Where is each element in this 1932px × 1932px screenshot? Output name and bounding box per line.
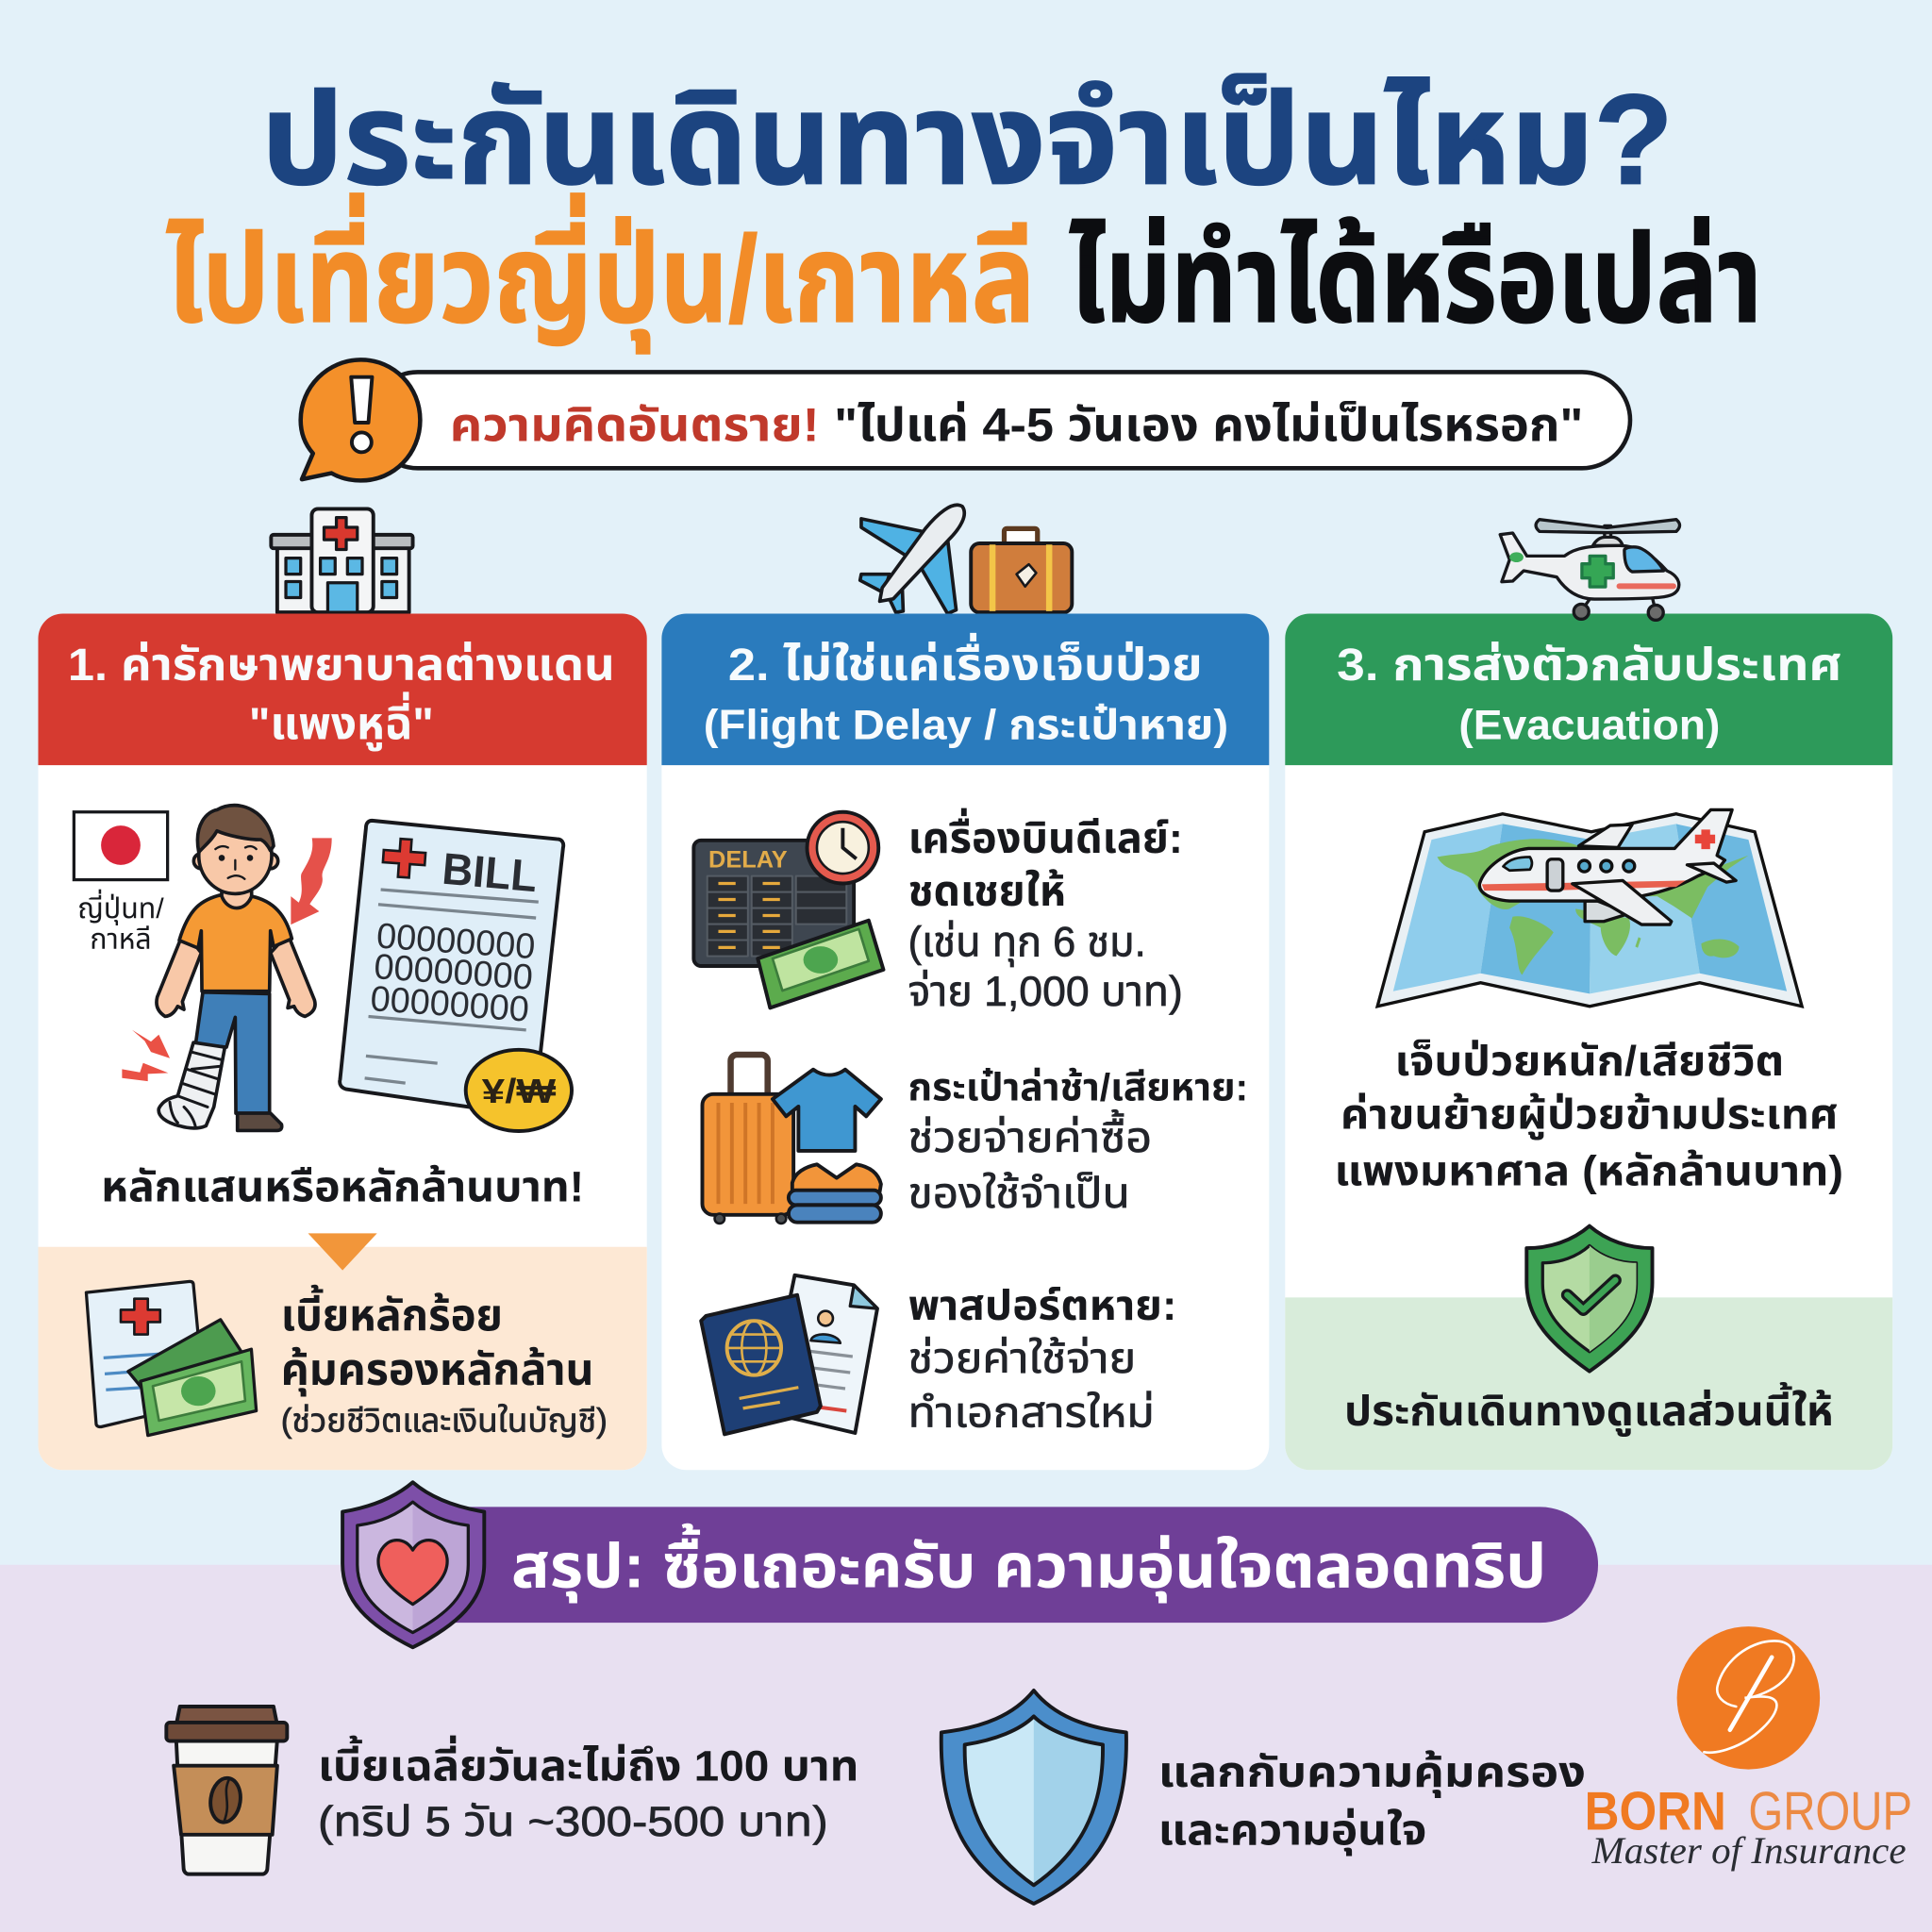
warning callout <box>301 359 1630 480</box>
evacuation text: ค่าขนย้ายผู้ป่วยข้ามประเทศ <box>1341 1091 1839 1140</box>
evacuation text: เจ็บป่วยหนัก/เสียชีวิต <box>1395 1039 1784 1085</box>
premium per day text: (ทริป 5 วัน ~300-500 บาท) <box>318 1799 828 1845</box>
baggage text: ช่วยจ่ายค่าซื้อ <box>908 1109 1152 1161</box>
icon: currency coin: ¥/₩ <box>482 1072 557 1110</box>
icon: delay board, clock and cash <box>693 812 883 1008</box>
panel header: medical costs: "แพงหูฉี่" <box>249 691 434 752</box>
coverage text: แลกกับความคุ้มครอง <box>1158 1748 1586 1798</box>
panel: medical costs <box>38 613 647 1470</box>
panel header: medical costs: 1. ค่ารักษาพยาบาลต่างแดน <box>68 640 615 691</box>
icon: hospital <box>271 508 413 612</box>
passport text: ทำเอกสารใหม่ <box>908 1390 1155 1436</box>
passport text: ช่วยค่าใช้จ่าย <box>908 1336 1136 1382</box>
panel header: evacuation: (Evacuation) <box>1458 703 1720 749</box>
delay text: เครื่องบินดีเลย์: <box>908 808 1183 862</box>
panel header: evacuation <box>1285 613 1892 765</box>
icon: delay board, clock and cash: DELAY <box>708 848 788 874</box>
premium per day text: เบี้ยเฉลี่ยวันละไม่ถึง 100 บาท <box>318 1735 858 1790</box>
arrow: down triangle <box>308 1233 377 1271</box>
icon: warning speech bubble <box>301 359 420 480</box>
delay text: จ่าย 1,000 บาท) <box>908 969 1183 1015</box>
icon: helicopter <box>1500 520 1680 620</box>
panel: evacuation <box>1285 613 1892 1470</box>
panel: premium callout: เบี้ยหลักร้อย <box>281 1284 503 1341</box>
evacuation text <box>1335 1039 1843 1194</box>
panel header: flight delay: (Flight Delay / กระเป๋าหาย) <box>704 703 1228 749</box>
warning callout: ความคิดอันตราย! <box>450 399 820 452</box>
coverage text <box>1158 1748 1586 1856</box>
icon: heart shield <box>342 1482 484 1647</box>
icon: pain sparks <box>122 1030 170 1081</box>
icon: passport and document <box>701 1275 877 1434</box>
panel header: flight delay <box>661 613 1269 765</box>
coverage text: และความอุ่นใจ <box>1158 1806 1426 1856</box>
panel: premium callout: คุ้มครองหลักล้าน <box>281 1344 594 1397</box>
panel: premium callout <box>38 1233 647 1470</box>
passport text: พาสปอร์ตหาย: <box>908 1283 1176 1329</box>
icon: currency coin <box>466 1050 572 1131</box>
summary banner: สรุป: ซื้อเถอะครับ ความอุ่นใจตลอดทริป <box>511 1523 1546 1603</box>
flag label: กาหลี <box>90 924 152 956</box>
panel: coverage strip: ประกันเดินทางดูแลส่วนนี้ให้ <box>1344 1381 1834 1437</box>
icon: green shield <box>1526 1226 1653 1372</box>
delay text: (เช่น ทุก 6 ชม. <box>908 920 1146 968</box>
icon: suitcase <box>971 528 1072 612</box>
icon: japan flag <box>74 812 168 880</box>
icon: bill document: 00000000 <box>373 947 534 998</box>
icon: bill document: 00000000 <box>375 916 537 967</box>
panel header: medical costs <box>38 613 647 765</box>
icon: red pain arrow <box>291 838 332 924</box>
baggage text: ของใช้จำเป็น <box>908 1171 1130 1217</box>
title: ประกันเดินทางจำเป็นไหม? <box>261 68 1674 211</box>
delay text <box>908 808 1183 1015</box>
summary banner <box>342 1482 1598 1647</box>
flag label <box>77 889 164 956</box>
icon: bill document: 00000000 <box>369 979 530 1030</box>
panel: premium callout: (ช่วยชีวิตและเงินในบัญชี) <box>281 1403 608 1440</box>
icon: blue shield <box>941 1690 1126 1904</box>
passport text <box>908 1283 1176 1436</box>
icon: coffee cup <box>166 1707 287 1874</box>
subtitle <box>166 192 1762 354</box>
icon: bill document: BILL <box>441 843 540 901</box>
delay text: ชดเชยให้ <box>908 867 1066 915</box>
evacuation text: แพงมหาศาล (หลักล้านบาท) <box>1335 1148 1843 1194</box>
panel: coverage strip <box>1285 1226 1892 1470</box>
subtitle: ไม่ทำได้หรือเปล่า <box>1070 210 1762 348</box>
baggage text: กระเป๋าล่าช้า/เสียหาย: <box>908 1065 1248 1108</box>
logo: born group: Master of Insurance <box>1591 1829 1907 1872</box>
icon: luggage and clothes <box>702 1055 881 1224</box>
premium per day text <box>318 1735 858 1845</box>
icon: world map <box>1377 814 1802 1007</box>
cost statement: หลักแสนหรือหลักล้านบาท! <box>101 1162 584 1210</box>
logo: born group: BORN <box>1585 1782 1726 1842</box>
icon: bill document <box>340 821 563 1116</box>
icon: medical jet <box>1479 809 1736 924</box>
baggage text <box>908 1065 1248 1217</box>
icon: injured man <box>157 806 315 1130</box>
logo: born group <box>1585 1626 1912 1872</box>
flag label: ญี่ปุ่นท/ <box>77 889 164 925</box>
panel header: evacuation: 3. การส่งตัวกลับประเทศ <box>1337 640 1842 691</box>
icon: airplane <box>860 505 964 613</box>
panel: flight delay and baggage <box>661 613 1269 1470</box>
panel header: flight delay: 2. ไม่ใช่แค่เรื่องเจ็บป่วย <box>728 632 1203 691</box>
subtitle: ไปเที่ยวญี่ปุ่น/เกาหลี <box>166 192 1035 354</box>
icon: policy and cash <box>86 1281 257 1436</box>
warning callout: "ไปแค่ 4-5 วันเอง คงไม่เป็นไรหรอก" <box>834 399 1583 452</box>
